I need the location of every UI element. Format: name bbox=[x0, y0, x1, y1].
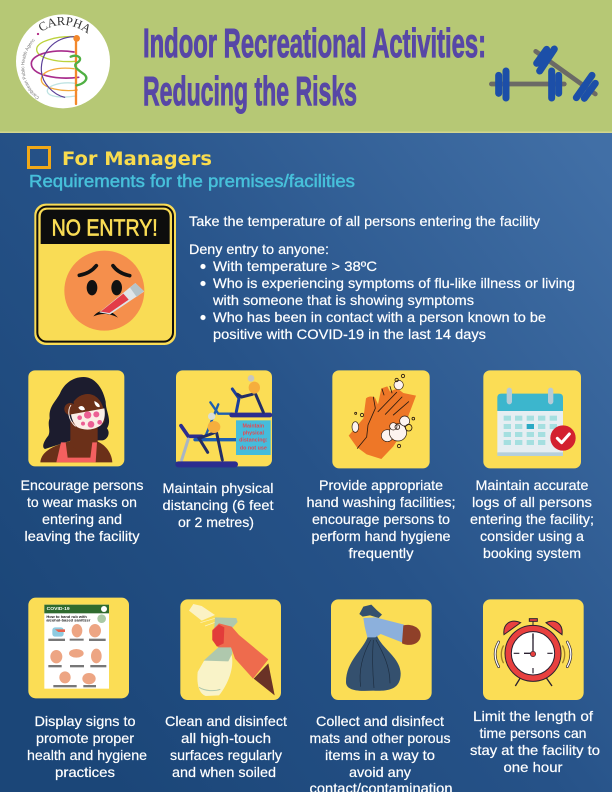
logo: CARPHA bbox=[16, 14, 110, 108]
caption: signs: promote proper bbox=[36, 730, 134, 746]
caption: mats bbox=[310, 713, 452, 792]
caption: masks: entering and bbox=[42, 511, 122, 527]
caption: masks bbox=[20, 477, 144, 544]
logo: CARPHA: CARPHA bbox=[39, 17, 89, 34]
caption: disinfect: surfaces regularly bbox=[170, 747, 282, 763]
caption: distancing: Maintain physical bbox=[162, 480, 274, 496]
title: Reducing the Risks bbox=[143, 68, 357, 114]
caption: signs: practices bbox=[55, 764, 115, 780]
caption: disinfect: all high-touch bbox=[181, 730, 271, 746]
caption: time limit: one hour bbox=[504, 759, 563, 775]
header band bbox=[0, 0, 612, 133]
caption: time limit: Limit the length of bbox=[473, 708, 593, 724]
caption: distancing: distancing (6 feet bbox=[162, 497, 274, 513]
icon: woman wearing mask bbox=[28, 370, 124, 466]
caption: distancing bbox=[162, 480, 274, 530]
caption: disinfect bbox=[165, 713, 287, 780]
icon: no entry sign: NO ENTRY! bbox=[52, 215, 158, 241]
title bbox=[143, 20, 486, 114]
caption: disinfect: Clean and disinfect bbox=[165, 713, 287, 729]
caption: hand washing: encourage persons to bbox=[312, 511, 450, 527]
caption: time limit bbox=[470, 708, 600, 775]
section marker square bbox=[28, 148, 50, 168]
icon: tied garbage bag bbox=[331, 599, 432, 700]
icon: treadmills with distancing sign: Maintain bbox=[243, 424, 264, 430]
icon: no entry sign bbox=[34, 204, 176, 345]
icon: treadmills with distancing sign: distancing: bbox=[239, 437, 268, 443]
caption: mats: avoid any bbox=[349, 764, 411, 780]
caption: masks: Encourage persons bbox=[20, 477, 144, 493]
icon: calendar with check bbox=[483, 370, 581, 468]
caption: logs bbox=[470, 477, 594, 561]
icon: hand rub poster: COVID-19 bbox=[47, 606, 70, 612]
caption: masks: leaving the facility bbox=[24, 528, 140, 544]
text block: entry screening: Who has been in contact with a person known to be bbox=[213, 309, 546, 325]
caption: signs: Display signs to bbox=[34, 713, 136, 729]
caption: time limit: stay at the facility to bbox=[470, 742, 600, 758]
icon: hand rub poster bbox=[28, 598, 129, 698]
icon: dumbbells bbox=[491, 49, 595, 98]
caption: hand washing: perform hand hygiene bbox=[312, 528, 451, 544]
caption: logs: booking system bbox=[483, 545, 581, 561]
icon: spray bottle in gloved hand bbox=[180, 599, 281, 700]
text block: entry screening: with someone that is showing symptoms bbox=[212, 292, 474, 308]
subheading: Requirements for the premises/facilities bbox=[29, 171, 355, 191]
icon: hand washing bbox=[332, 370, 430, 468]
caption: logs: consider using a bbox=[480, 528, 584, 544]
icon: treadmills with distancing sign: physical bbox=[243, 430, 265, 436]
icon: treadmills with distancing sign: do not use bbox=[240, 446, 267, 452]
heading: For Managers: For Managers bbox=[62, 149, 212, 170]
caption: signs bbox=[27, 713, 147, 780]
caption: distancing: or 2 metres) bbox=[178, 514, 254, 530]
caption: mats: Collect and disinfect bbox=[316, 713, 444, 729]
text block: entry screening: positive with COVID-19 in the last 14 days bbox=[213, 326, 486, 342]
caption: logs: logs of all persons bbox=[472, 494, 592, 510]
caption: hand washing: frequently bbox=[348, 545, 414, 561]
caption: mats: mats and other porous bbox=[310, 730, 450, 746]
text block: entry screening: With temperature > 38ºC bbox=[213, 258, 377, 274]
caption: logs: Maintain accurate bbox=[476, 477, 589, 493]
icon: alarm clock bbox=[483, 599, 584, 700]
caption: signs: health and hygiene bbox=[27, 747, 147, 763]
caption: masks: to wear masks on bbox=[27, 494, 137, 510]
text block: entry screening bbox=[189, 213, 575, 342]
text block: entry screening: Deny entry to anyone: bbox=[189, 241, 329, 257]
caption: hand washing: hand washing facilities; bbox=[306, 494, 456, 510]
icon: treadmills with distancing sign bbox=[176, 370, 272, 466]
caption: hand washing: Provide appropriate bbox=[319, 477, 443, 493]
text block: entry screening: Who is experiencing symptoms of flu-like illness or living bbox=[213, 275, 575, 291]
caption: hand washing bbox=[306, 477, 456, 561]
text block: entry screening: Take the temperature of all persons entering the facility bbox=[189, 213, 540, 229]
caption: mats: items in a way to bbox=[325, 747, 435, 763]
caption: logs: entering the facility; bbox=[470, 511, 594, 527]
caption: disinfect: and when soiled bbox=[172, 764, 276, 780]
icon: hand rub poster: alcohol-based sanitizer bbox=[46, 618, 91, 623]
caption: time limit: time persons can bbox=[480, 725, 586, 741]
icon: hand rub poster: How to hand rub with bbox=[46, 614, 87, 619]
